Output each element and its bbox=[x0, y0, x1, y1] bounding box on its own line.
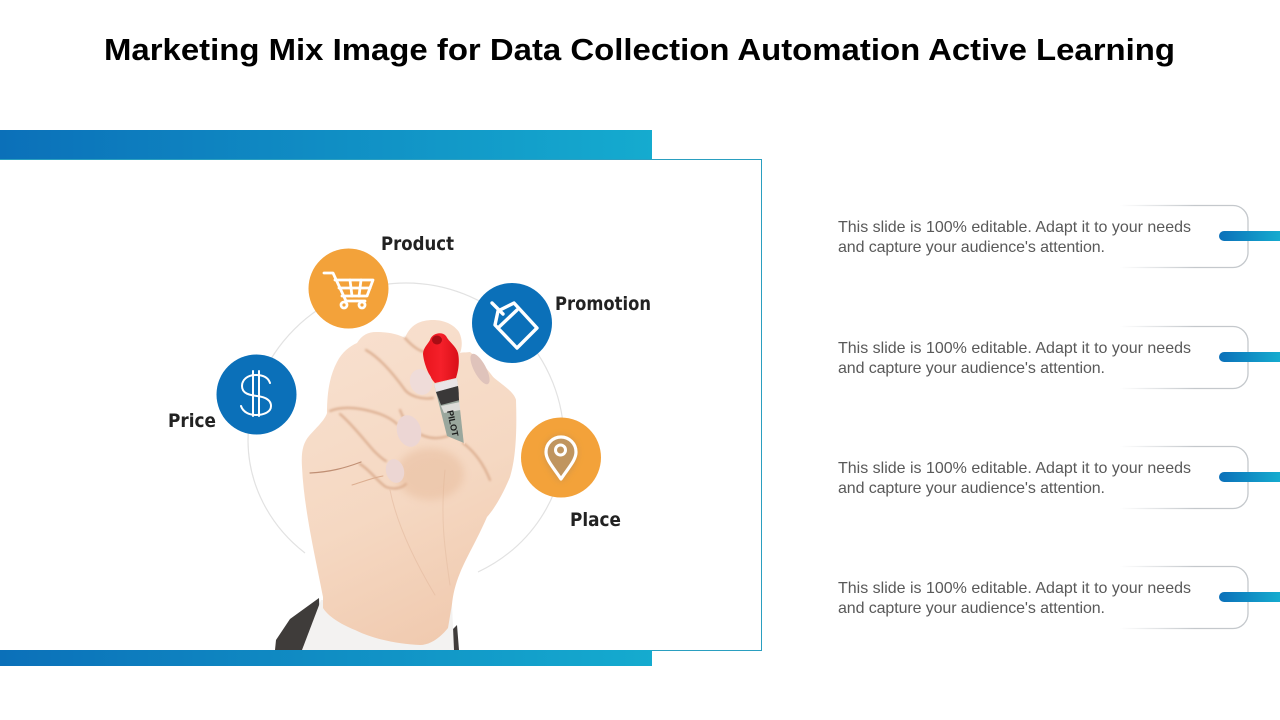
panel: image frame bbox=[0, 130, 762, 666]
nail: ring bbox=[383, 457, 407, 485]
marker tip bbox=[432, 336, 442, 344]
callout 2 pill bbox=[1219, 352, 1280, 362]
thumb over marker bbox=[459, 352, 516, 445]
illustration: hand with marker bbox=[275, 320, 516, 650]
bottom gradient bar bbox=[0, 650, 652, 666]
label: place: Place bbox=[570, 509, 621, 531]
marker label: PILOT bbox=[445, 409, 460, 438]
nail: middle bbox=[393, 412, 425, 450]
callout 4 pill bbox=[1219, 592, 1280, 602]
frame outline bbox=[0, 160, 762, 650]
diagram ring bbox=[248, 283, 564, 572]
callout 3 bbox=[838, 446, 1280, 508]
hand bbox=[302, 320, 516, 645]
callout 3 text: This slide is 100% editable. Adapt it to your needs bbox=[838, 460, 1191, 477]
nail: thumb bbox=[467, 351, 493, 387]
title: Marketing Mix Image for Data Collection Automation Active Learning bbox=[104, 32, 1175, 67]
marker cap bbox=[423, 333, 459, 383]
callout 2 text: and capture your audience's attention. bbox=[838, 360, 1105, 377]
label: product: Product bbox=[381, 233, 454, 255]
icon: price dollar bbox=[216, 354, 296, 434]
callout 1 pill bbox=[1219, 231, 1280, 241]
callout 2 text: This slide is 100% editable. Adapt it to your needs bbox=[838, 340, 1191, 357]
jacket sleeve bbox=[275, 598, 459, 650]
callout 4 text: This slide is 100% editable. Adapt it to your needs bbox=[838, 580, 1191, 597]
palm shading bbox=[396, 448, 464, 500]
callout 1 bbox=[838, 206, 1280, 268]
icon: promotion tag bbox=[472, 283, 552, 363]
callout 3 pill bbox=[1219, 472, 1280, 482]
marker barrel bbox=[434, 378, 464, 443]
label: price: Price bbox=[168, 410, 216, 432]
callout 4 bbox=[838, 566, 1280, 628]
icon: place pin bbox=[521, 418, 601, 498]
callout 4 text: and capture your audience's attention. bbox=[838, 600, 1105, 617]
top gradient bar bbox=[0, 130, 652, 160]
nail: index bbox=[407, 366, 435, 398]
callout 3 text: and capture your audience's attention. bbox=[838, 480, 1105, 497]
label: promotion: Promotion bbox=[555, 293, 651, 315]
icon: product cart bbox=[308, 248, 388, 328]
callout 1 text: This slide is 100% editable. Adapt it to your needs bbox=[838, 219, 1191, 236]
callout 1 text: and capture your audience's attention. bbox=[838, 239, 1105, 256]
callout 2 bbox=[838, 326, 1280, 388]
shirt cuff bbox=[302, 600, 454, 650]
finger creases bbox=[310, 338, 490, 595]
